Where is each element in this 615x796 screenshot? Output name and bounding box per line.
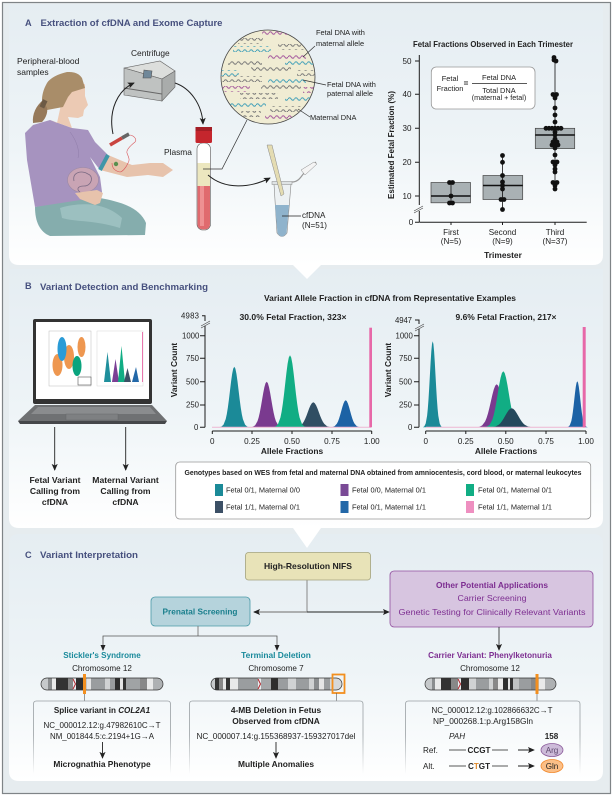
connector: prenatal branches xyxy=(100,626,280,651)
notch: pointer from panel A xyxy=(293,265,321,279)
result box: splice variant xyxy=(34,694,170,775)
result box: PAH variant: CTGT xyxy=(468,762,490,771)
result box: PAH variant: Ref. xyxy=(423,746,438,755)
histogram: 30.0% fetal fraction xyxy=(169,312,380,456)
result box: splice variant: Micrognathia Phenotype xyxy=(53,759,151,769)
box: high-resolution NIFS: High-Resolution NIFS xyxy=(264,562,353,571)
arrow: to maternal variant calling xyxy=(125,427,127,470)
icon: centrifuge machine xyxy=(124,61,175,101)
box: third trimester xyxy=(535,55,575,191)
legend item: fetal 0/0 maternal 0/1: Fetal 0/0, Maternal 0/1 xyxy=(352,486,426,494)
result box: PAH variant: Alt. xyxy=(423,762,435,771)
heading: panel C: C xyxy=(25,550,32,560)
callout: fetal DNA with maternal allele: maternal allele xyxy=(316,39,364,48)
label: maternal variant calling: Maternal Variant xyxy=(92,475,159,485)
legend item: fetal 1/1 maternal 0/1: Fetal 1/1, Maternal 0/1 xyxy=(226,502,300,512)
result box: splice variant: NM_001844.5:c.2194+1G→A xyxy=(50,732,155,741)
formula: fetal fraction xyxy=(431,67,535,109)
box: other potential applications: Other Potential Applications xyxy=(436,581,549,590)
label: fetal variant calling: cfDNA xyxy=(42,497,68,507)
label: cfDNA N=51: cfDNA xyxy=(302,211,326,220)
heading: panel A: Extraction of cfDNA and Exome Capture xyxy=(40,18,222,28)
callout: maternal DNA: Maternal DNA xyxy=(310,113,356,122)
legend item: fetal 0/1 maternal 0/1 xyxy=(466,484,552,496)
lens: cfDNA strands xyxy=(221,30,317,124)
icon: laptop showing plots xyxy=(18,319,167,424)
chromosome 7 ideogram xyxy=(211,674,344,693)
result box: PAH variant: NP_000268.1:p.Arg158Gln xyxy=(433,717,533,726)
formula: fetal fraction: Fraction xyxy=(437,84,463,93)
legend item: fetal 0/1 maternal 0/0 xyxy=(215,484,300,496)
histogram: 30.0% fetal fraction: Allele Fractions xyxy=(261,446,324,456)
heading: panel A: A xyxy=(25,18,32,28)
case: terminal deletion: Chromosome 7 xyxy=(248,664,304,673)
callout line: plasma to lens xyxy=(203,120,247,169)
panel: B variant detection xyxy=(9,265,603,528)
case: Stickler's syndrome: Chromosome 12 xyxy=(72,664,132,673)
result box: 4-MB deletion: Multiple Anomalies xyxy=(238,759,314,769)
label: cfDNA N=51 xyxy=(282,211,327,230)
label: peripheral-blood samples: samples xyxy=(17,67,49,77)
histogram: 30.0% fetal fraction: 0 xyxy=(194,423,199,432)
heading: panel C: Variant Interpretation xyxy=(40,550,138,560)
x axis: (N=37) xyxy=(543,237,568,246)
arrow: to fetal variant calling xyxy=(54,427,56,470)
formula: fetal fraction: (maternal + fetal) xyxy=(472,93,526,102)
histogram: 30.0% fetal fraction: 1000 xyxy=(182,332,200,340)
y axis: Estimated Fetal Fraction (%) xyxy=(387,91,396,199)
box plot: fetal fractions per trimester xyxy=(387,40,587,260)
legend item: fetal 0/1 maternal 0/1: Fetal 0/1, Maternal 0/1 xyxy=(478,486,552,494)
y axis: 0 xyxy=(409,218,414,227)
histogram: 30.0% fetal fraction: 0.25 xyxy=(244,437,260,446)
case: terminal deletion: Terminal Deletion xyxy=(241,650,311,660)
histogram: 9.6% fetal fraction: 250 xyxy=(399,400,413,410)
y axis: 50 xyxy=(402,57,412,66)
label: peripheral-blood samples: Peripheral-blood xyxy=(17,56,80,66)
result box: PAH variant: 158 xyxy=(545,732,559,741)
legend item: fetal 1/1 maternal 1/1: Fetal 1/1, Maternal 1/1 xyxy=(478,502,552,512)
result box: PAH variant: CCGT xyxy=(468,746,491,755)
box: prenatal screening xyxy=(151,597,250,626)
legend item: fetal 0/1 maternal 1/1 xyxy=(340,501,426,513)
histogram: 30.0% fetal fraction: 750 xyxy=(186,354,200,363)
result box: PAH variant: NC_000012.12:g.102866632C→T xyxy=(432,706,553,715)
label: fetal variant calling: Fetal Variant xyxy=(29,475,81,485)
box: prenatal screening: Prenatal Screening xyxy=(162,608,238,616)
amino acid: Arg xyxy=(541,744,563,756)
histogram: 9.6% fetal fraction: 1000 xyxy=(396,332,414,340)
histogram: 9.6% fetal fraction: 750 xyxy=(399,354,413,363)
label: fetal variant calling: Calling from xyxy=(30,486,80,496)
histogram: 9.6% fetal fraction: 4947 xyxy=(395,316,412,325)
y axis xyxy=(387,55,423,227)
arrow: blood to centrifuge xyxy=(112,83,134,134)
case: terminal deletion xyxy=(190,650,363,775)
chart title: Fetal Fractions Observed in Each Trimester xyxy=(413,40,574,49)
result box: 4-MB deletion: Observed from cfDNA xyxy=(232,716,320,726)
legend: genotypes: Genotypes based on WES from fetal and maternal DNA obtained from amniocentesis, cord blood, or maternal leukocytes xyxy=(184,468,582,477)
histogram: 9.6% fetal fraction xyxy=(383,313,594,456)
histogram: 30.0% fetal fraction: 0 xyxy=(210,437,215,446)
label: cfDNA N=51: (N=51) xyxy=(302,221,327,230)
case: carrier variant phenylketonuria xyxy=(406,651,580,775)
label: maternal variant calling xyxy=(92,475,159,507)
formula: fetal fraction: Total DNA xyxy=(482,86,516,95)
histogram: 9.6% fetal fraction: 1.00 xyxy=(578,437,594,446)
x axis: Second xyxy=(489,228,516,237)
legend item: fetal 1/1 maternal 0/1 xyxy=(215,501,300,513)
chart title: variant allele fraction: Variant Allele Fraction in cfDNA from Representative Examples xyxy=(264,294,517,303)
y axis: 20 xyxy=(402,158,412,167)
result box: 4-MB deletion: NC_000007.14:g.155368937-159327017del xyxy=(196,732,356,741)
amino acid: Arg: Arg xyxy=(546,746,558,755)
heading: panel B: B xyxy=(25,281,32,291)
formula: fetal fraction: Fetal xyxy=(442,74,459,83)
chromosome 12 ideogram xyxy=(41,674,163,694)
x axis xyxy=(419,222,587,260)
x axis: (N=5) xyxy=(441,237,462,246)
illustration: pregnant woman giving blood xyxy=(25,72,173,236)
result box: 4-MB deletion: 4-MB Deletion in Fetus xyxy=(231,705,321,715)
label: centrifuge: Centrifuge xyxy=(131,48,170,58)
x axis: First xyxy=(443,228,460,237)
icon: blood collection tube xyxy=(196,127,212,230)
callout: fetal DNA with paternal allele xyxy=(303,80,376,98)
y axis: 10 xyxy=(402,192,412,201)
label: plasma: Plasma xyxy=(164,147,192,157)
arrow: plasma to microtube xyxy=(208,175,270,186)
box: other potential applications: Carrier Screening xyxy=(458,594,526,603)
formula: fetal fraction: = xyxy=(464,79,469,88)
histogram: 9.6% fetal fraction: 500 xyxy=(399,378,413,386)
callout: fetal DNA with paternal allele: paternal allele xyxy=(327,89,373,98)
amino acid: Gln xyxy=(541,760,563,772)
legend: genotypes xyxy=(176,462,591,519)
histogram: 9.6% fetal fraction: 9.6% Fetal Fraction, 217× xyxy=(456,313,557,322)
result box: PAH variant xyxy=(406,694,580,775)
heading: panel B: Variant Detection and Benchmarking xyxy=(40,282,208,292)
formula: fetal fraction: Fetal DNA xyxy=(482,73,516,82)
histogram: 9.6% fetal fraction: 0 xyxy=(408,423,413,432)
notch: pointer from panel B xyxy=(293,528,321,548)
histogram: 30.0% fetal fraction: 4983 xyxy=(181,312,199,320)
histogram: 9.6% fetal fraction: 0.25 xyxy=(458,437,474,446)
callout: maternal DNA xyxy=(298,109,356,122)
chromosome 12 ideogram xyxy=(425,674,556,694)
histogram: 30.0% fetal fraction: 0.50 xyxy=(284,437,300,446)
histogram: 30.0% fetal fraction: 1.00 xyxy=(364,437,380,446)
x axis: (N=9) xyxy=(492,237,513,246)
panel: C variant interpretation xyxy=(9,528,603,781)
histogram: 30.0% fetal fraction: 250 xyxy=(186,400,200,410)
case: carrier variant phenylketonuria: Chromosome 12 xyxy=(460,664,520,673)
callout: fetal DNA with maternal allele: Fetal DNA with xyxy=(316,28,365,37)
box: other potential applications xyxy=(390,571,593,627)
label: peripheral-blood samples xyxy=(17,56,80,77)
label: fetal variant calling xyxy=(29,475,81,507)
histogram: 9.6% fetal fraction: 0.75 xyxy=(538,437,554,446)
panel: A extraction of cfDNA xyxy=(9,4,603,265)
box: high-resolution NIFS xyxy=(246,552,370,580)
y axis: 30 xyxy=(402,124,412,133)
histogram: 9.6% fetal fraction: Allele Fractions xyxy=(475,446,538,456)
result box: splice variant: Splice variant in COL2A1 xyxy=(54,706,151,715)
case: Stickler's syndrome: Stickler's Syndrome xyxy=(63,651,141,660)
histogram: 30.0% fetal fraction: 500 xyxy=(186,378,200,386)
histogram: 9.6% fetal fraction: 0.50 xyxy=(498,437,514,446)
histogram: 9.6% fetal fraction: 0 xyxy=(423,437,428,446)
arrow: other applications to carrier variant xyxy=(498,627,500,650)
result box: splice variant: NC_000012.12:g.47982610C→T xyxy=(44,721,161,730)
icon: microtube with cfDNA xyxy=(267,145,317,236)
label: maternal variant calling: Calling from xyxy=(100,486,151,496)
histogram: 30.0% fetal fraction: Variant Count xyxy=(169,343,179,397)
y axis: 40 xyxy=(402,90,412,99)
box: second trimester xyxy=(483,153,523,212)
box: other potential applications: Genetic Testing for Clinically Relevant Variants xyxy=(398,608,586,617)
case: carrier variant phenylketonuria: Carrier Variant: Phenylketonuria xyxy=(428,651,552,660)
histogram: 30.0% fetal fraction: 0.75 xyxy=(324,437,340,446)
callout: fetal DNA with maternal allele xyxy=(303,28,365,57)
result box: 4-MB deletion xyxy=(190,693,363,775)
legend item: fetal 1/1 maternal 1/1 xyxy=(466,501,552,513)
case: Stickler's syndrome xyxy=(34,651,170,775)
x axis: Trimester xyxy=(484,250,523,260)
callout: fetal DNA with paternal allele: Fetal DNA with xyxy=(327,80,376,89)
x axis: Third xyxy=(546,228,564,237)
histogram: 30.0% fetal fraction: 30.0% Fetal Fraction, 323× xyxy=(240,313,347,322)
legend item: fetal 0/1 maternal 0/0: Fetal 0/1, Maternal 0/0 xyxy=(226,486,300,494)
amino acid: Gln: Gln xyxy=(546,762,558,771)
histogram: 9.6% fetal fraction: Variant Count xyxy=(383,343,393,397)
box: first trimester xyxy=(431,180,470,205)
connector: NIFS branch xyxy=(254,580,389,612)
arrow: centrifuge to tube xyxy=(175,83,203,124)
legend item: fetal 0/0 maternal 0/1 xyxy=(340,484,426,496)
label: maternal variant calling: cfDNA xyxy=(112,497,139,507)
legend item: fetal 0/1 maternal 1/1: Fetal 0/1, Maternal 1/1 xyxy=(352,502,426,512)
result box: PAH variant: PAH xyxy=(449,732,465,741)
